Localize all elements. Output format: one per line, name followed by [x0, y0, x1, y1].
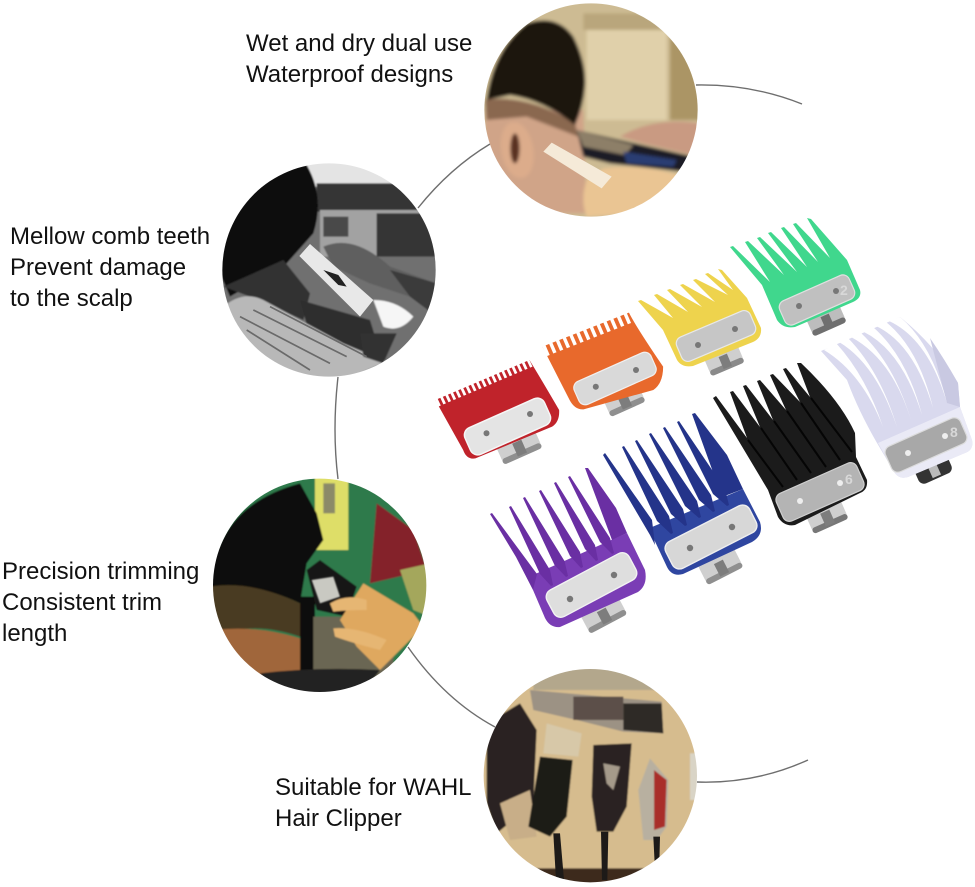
comb: white: [821, 317, 972, 486]
comb: yellow: [638, 269, 761, 376]
comb: green: 2: [840, 282, 848, 298]
text: precision trimming: Precision trimming: [2, 558, 199, 585]
text: precision trimming: length: [2, 620, 67, 647]
product: set of eight guide combs: [435, 218, 972, 634]
comb: black: [713, 363, 867, 534]
comb: green: [730, 218, 860, 337]
photo: precision trimming close up: [210, 477, 430, 697]
text: wet and dry: Waterproof designs: [246, 61, 453, 88]
text: mellow comb teeth: Mellow comb teeth: [10, 223, 210, 250]
comb: black: 6: [845, 471, 853, 487]
text: mellow comb teeth: to the scalp: [10, 285, 133, 312]
photo: barber trimming fade with comb: [477, 0, 703, 223]
comb: blue: [603, 413, 761, 585]
text: precision trimming: Consistent trim: [2, 589, 162, 616]
text: suitable for WAHL: Suitable for WAHL: [275, 774, 472, 801]
connector curves: [335, 85, 808, 782]
comb: white: 8: [950, 424, 958, 440]
text: wet and dry: Wet and dry dual use: [246, 30, 472, 57]
comb: orange: [542, 313, 663, 417]
photo: black and white clipper in use: [220, 160, 440, 380]
comb: purple: [490, 468, 646, 634]
comb: red: [435, 360, 559, 465]
photo: row of WAHL clippers on a shelf: [480, 667, 700, 887]
text: mellow comb teeth: Prevent damage: [10, 254, 186, 281]
text: suitable for WAHL: Hair Clipper: [275, 805, 402, 832]
